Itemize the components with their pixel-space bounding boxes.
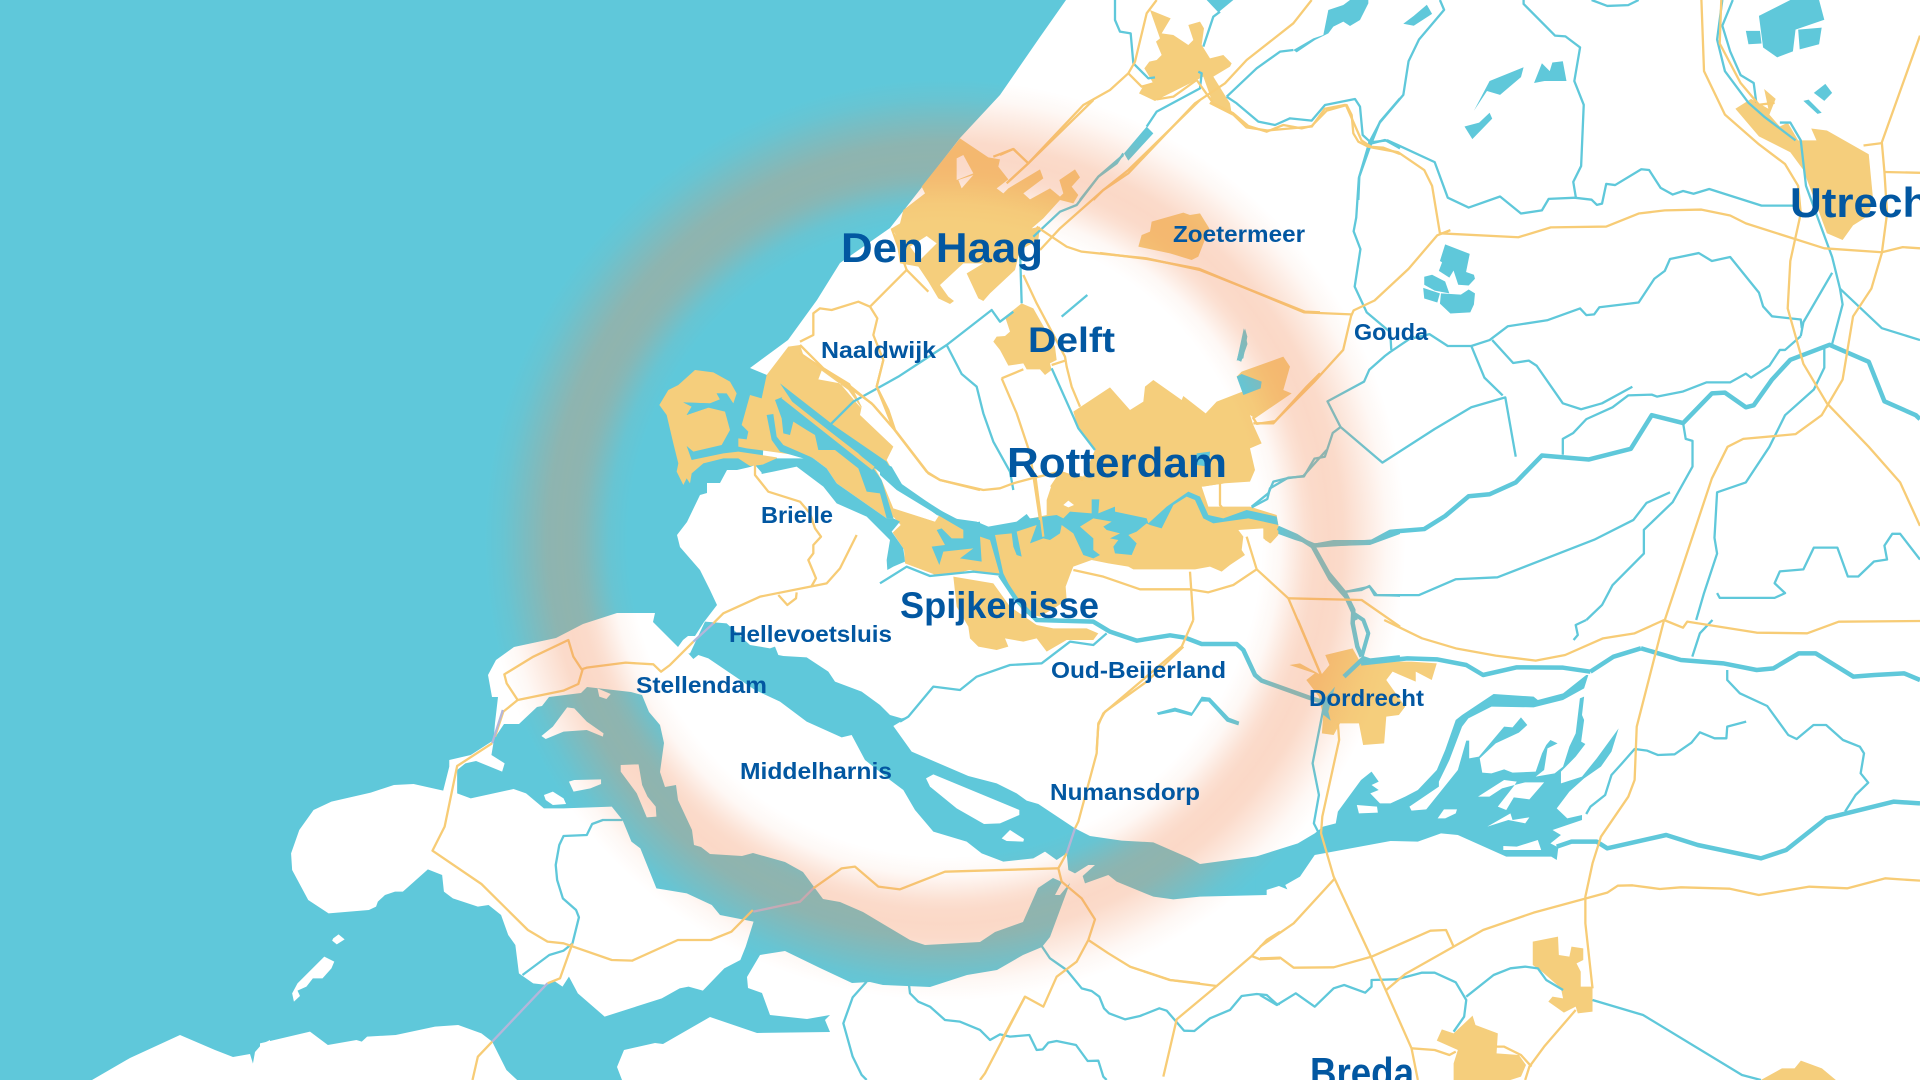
label: Brielle: Brielle	[761, 502, 833, 528]
city: Maasvlakte and Europoort	[659, 345, 900, 518]
rivers: central east	[1237, 0, 1920, 620]
city: Utrecht	[1735, 89, 1873, 240]
channel: Nieuwe Maas port basins	[880, 462, 1400, 725]
roads: north-west	[1000, 0, 1400, 200]
land: mainland	[488, 0, 1920, 1080]
water: small lakes near Rotterdam	[1197, 328, 1262, 467]
label: Gouda: Gouda	[1354, 319, 1428, 345]
land: islands	[260, 688, 754, 1080]
roads: Brabant	[980, 932, 1280, 1080]
lakes: north	[1080, 0, 1400, 200]
label: Rotterdam: Rotterdam	[1007, 439, 1227, 486]
rivers: Delfland	[830, 155, 1123, 490]
lakes and rivers	[522, 0, 1920, 1080]
water: port channels	[683, 328, 1400, 725]
roads: Zeeland	[432, 710, 753, 1080]
land: south-west strip	[92, 1035, 258, 1080]
city: Dordrecht and Breda	[1289, 648, 1836, 1080]
label: Numansdorp: Numansdorp	[1050, 779, 1200, 805]
roads: Utrecht and centre	[1100, 0, 1920, 620]
label: Stellendam: Stellendam	[636, 672, 767, 698]
label: Middelharnis: Middelharnis	[740, 758, 892, 784]
roads: south-east	[1260, 620, 1920, 1080]
city: Den Haag	[892, 138, 1080, 304]
label: Spijkenisse: Spijkenisse	[900, 585, 1099, 626]
city: Delft, Zoetermeer, Rotterdam north	[993, 213, 1292, 487]
rivers: Hoeksche Waard	[880, 450, 1400, 722]
city: Rotterdam south, port and Spijkenisse	[890, 477, 1278, 652]
rivers: south centre	[843, 946, 1280, 1080]
roads: Hoeksche Waard	[1035, 473, 1400, 750]
label: Den Haag: Den Haag	[841, 224, 1043, 271]
roads: Delfland	[800, 100, 1320, 520]
rivers: south-east	[1260, 620, 1920, 1080]
roads	[432, 0, 1920, 1080]
label: Delft: Delft	[1028, 321, 1115, 360]
rivers: Zeeland canal	[522, 820, 622, 975]
city: Leiden	[1139, 10, 1232, 113]
label: Hellevoetsluis: Hellevoetsluis	[729, 621, 892, 647]
sea	[0, 0, 1100, 1080]
label: Zoetermeer: Zoetermeer	[1173, 221, 1305, 247]
lakes: north-east	[1403, 0, 1832, 314]
water: Biesbosch	[1256, 675, 1619, 893]
labels: place names	[636, 179, 1920, 1080]
roads: Voorne and Goeree	[495, 345, 980, 737]
channel: Nieuwe Waterweg and Calandkanaal	[683, 383, 980, 570]
water: Haringvliet and Hollandsch Diep	[688, 622, 1267, 899]
label: Dordrecht: Dordrecht	[1309, 685, 1424, 711]
roads: Moerdijk	[753, 647, 1200, 1040]
label: Oud-Beijerland: Oud-Beijerland	[1051, 657, 1226, 683]
label: Naaldwijk: Naaldwijk	[821, 337, 936, 363]
cities	[659, 10, 1873, 1080]
